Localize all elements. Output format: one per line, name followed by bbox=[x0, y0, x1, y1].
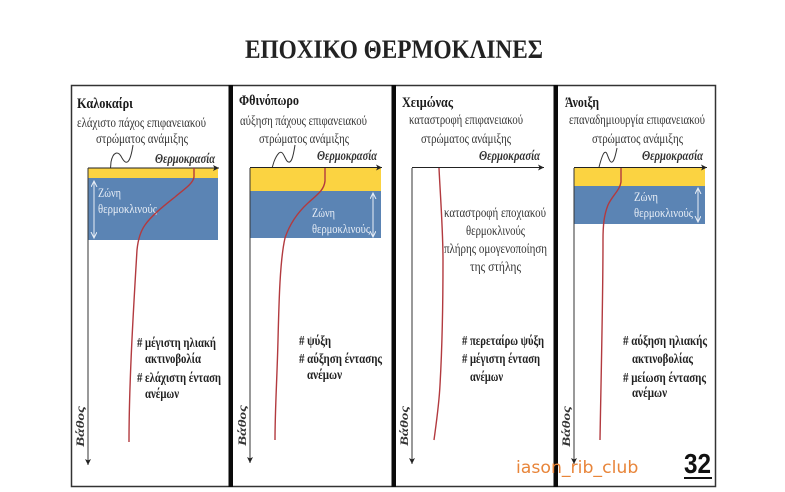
zone arrow: summer bbox=[93, 181, 95, 238]
panel: summer bbox=[74, 85, 233, 487]
description: spring: στρώματος ανάμιξης bbox=[592, 132, 683, 147]
mixed layer: autumn bbox=[250, 168, 381, 191]
winter explanation: καταστροφή εποχιακού bbox=[444, 206, 546, 221]
heading: summer: Καλοκαίρι bbox=[77, 96, 133, 112]
title: ΕΠΟΧΙΚΟ ΘΕΡΜΟΚΛΙΝΕΣ bbox=[245, 35, 543, 64]
description: summer: στρώματος ανάμιξης bbox=[96, 132, 188, 147]
temperature label: summer: Θερμοκρασία bbox=[155, 151, 215, 166]
winter explanation: θερμοκλινούς bbox=[466, 224, 525, 239]
thermocline zone: autumn bbox=[250, 191, 381, 238]
depth label: spring: Βάθος bbox=[560, 405, 573, 448]
notes: spring: ακτινοβολίας bbox=[632, 351, 693, 366]
notes: winter: # μέγιστη ένταση bbox=[462, 351, 540, 366]
temperature curve: winter bbox=[434, 168, 443, 440]
temperature axis: summer bbox=[88, 167, 219, 169]
winter explanation: πλήρης ομογενοποίηση bbox=[444, 242, 547, 257]
notes: summer: # ελάχιστη ένταση bbox=[137, 370, 221, 385]
heading: autumn: Φθινόπωρο bbox=[239, 93, 299, 109]
notes: winter: # περεταίρω ψύξη bbox=[462, 333, 544, 348]
outer frame bbox=[72, 86, 716, 486]
divider bbox=[392, 85, 396, 487]
panel: spring bbox=[560, 95, 707, 464]
mixed layer: spring bbox=[574, 168, 705, 186]
temperature axis: winter bbox=[412, 166, 544, 168]
zone label: autumn: θερμοκλινούς bbox=[312, 221, 371, 236]
notes: spring: ανέμων bbox=[632, 385, 667, 400]
page number: 32 bbox=[684, 448, 711, 479]
description: winter: στρώματος ανάμιξης bbox=[421, 132, 511, 147]
temperature curve: spring bbox=[600, 168, 621, 440]
temperature label: spring: Θερμοκρασία bbox=[642, 148, 703, 163]
zone label: summer: θερμοκλινούς bbox=[98, 201, 158, 216]
temperature axis: spring bbox=[574, 166, 707, 168]
callout arrow: autumn bbox=[271, 145, 295, 174]
zone label: spring: Ζώνη bbox=[634, 189, 658, 204]
callout arrow: summer bbox=[110, 145, 133, 175]
zone label: autumn: Ζώνη bbox=[312, 205, 335, 220]
heading: winter: Χειμώνας bbox=[402, 95, 454, 111]
thermocline zone: summer bbox=[88, 178, 218, 240]
depth label: winter: Βάθος bbox=[398, 405, 411, 447]
divider bbox=[228, 85, 233, 487]
description: autumn: στρώματος ανάμιξης bbox=[259, 132, 349, 147]
notes: winter: ανέμων bbox=[470, 369, 503, 384]
heading: spring: Άνοιξη bbox=[565, 95, 599, 111]
winter explanation: της στήλης bbox=[470, 260, 521, 275]
notes: autumn: # ψύξη bbox=[299, 333, 331, 348]
temperature curve: summer bbox=[129, 168, 194, 442]
panel: winter bbox=[398, 85, 558, 487]
description: spring: επαναδημιουργία επιφανειακού bbox=[569, 113, 705, 128]
depth axis: summer bbox=[87, 168, 89, 465]
zone label: spring: θερμοκλινούς bbox=[634, 205, 694, 220]
depth label: autumn: Βάθος bbox=[236, 404, 249, 447]
description: summer: ελάχιστο πάχος επιφανειακού bbox=[77, 116, 206, 131]
notes: autumn: ανέμων bbox=[307, 367, 342, 382]
temperature label: winter: Θερμοκρασία bbox=[479, 148, 540, 163]
temperature axis: autumn bbox=[250, 166, 382, 168]
notes: summer: ανέμων bbox=[145, 386, 179, 401]
depth axis: winter bbox=[411, 168, 413, 464]
temperature curve: autumn bbox=[275, 168, 325, 440]
notes: summer: # μέγιστη ηλιακή bbox=[137, 335, 216, 350]
callout arrow: spring bbox=[597, 148, 617, 175]
notes: autumn: # αύξηση έντασης bbox=[299, 351, 382, 366]
description: winter: καταστροφή επιφανειακού bbox=[409, 113, 523, 128]
depth axis: autumn bbox=[249, 168, 251, 463]
depth label: summer: Βάθος bbox=[74, 405, 87, 448]
mixed layer: summer bbox=[88, 168, 218, 178]
notes: spring: # μείωση έντασης bbox=[623, 370, 706, 385]
notes: summer: ακτινοβολία bbox=[145, 351, 201, 366]
temperature label: autumn: Θερμοκρασία bbox=[317, 148, 377, 163]
divider bbox=[554, 85, 558, 487]
zone arrow: spring bbox=[697, 188, 699, 222]
panel: autumn bbox=[236, 85, 396, 487]
thermocline zone: spring bbox=[574, 186, 705, 224]
watermark: iason_rib_club bbox=[516, 458, 638, 478]
zone label: summer: Ζώνη bbox=[98, 185, 121, 200]
notes: spring: # αύξηση ηλιακής bbox=[623, 333, 707, 348]
description: autumn: αύξηση πάχους επιφανειακού bbox=[240, 114, 367, 129]
depth axis: spring bbox=[573, 168, 575, 464]
zone arrow: autumn bbox=[372, 193, 374, 237]
